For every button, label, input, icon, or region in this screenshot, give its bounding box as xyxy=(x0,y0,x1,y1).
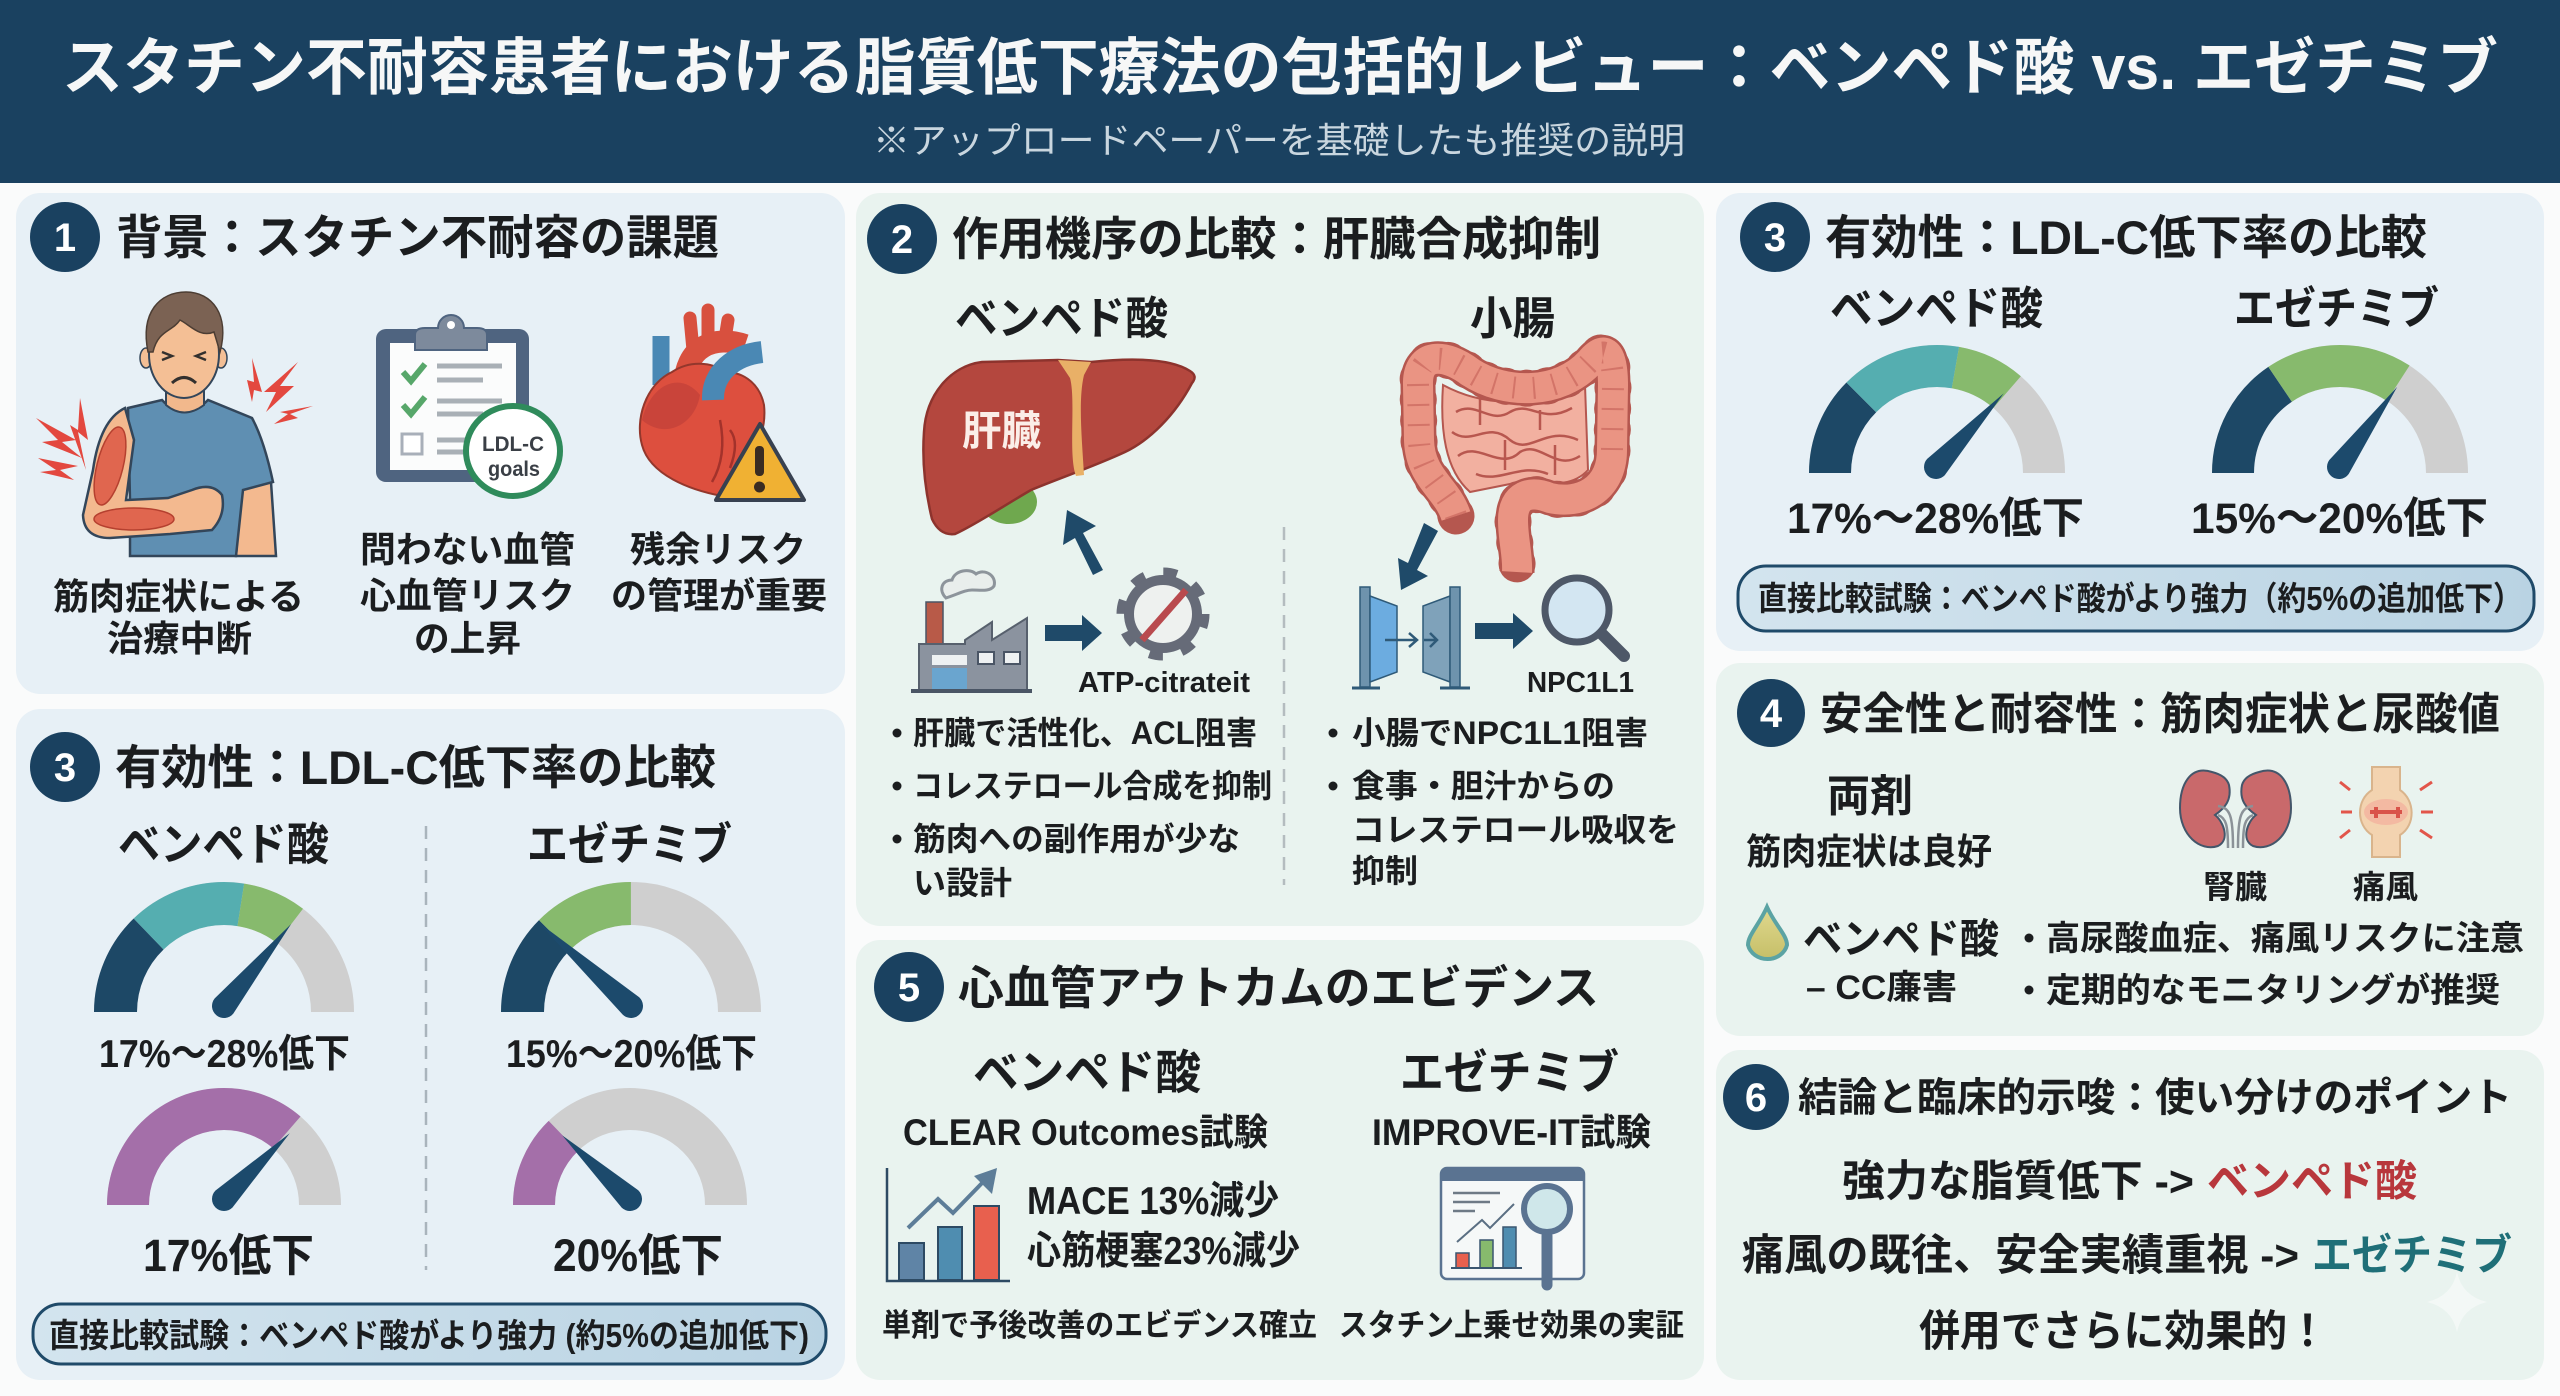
stat: MACE and MI: 心筋梗塞23%減少 xyxy=(1027,1230,1300,1273)
heading: efficacy xyxy=(30,732,716,802)
heading: background xyxy=(30,202,719,272)
icon: membrane transporter xyxy=(1352,587,1470,688)
bullets: ezetimibe mechanism: コレステロール吸収を xyxy=(1352,812,1679,848)
text: combination: 併用でさらに効果的！ xyxy=(1919,1308,2328,1356)
icon: heart with warning xyxy=(640,310,804,500)
icon: liver: 肝臓 xyxy=(962,408,1041,454)
value: 20%: 20%低下 xyxy=(553,1230,723,1281)
heading: conclusion xyxy=(1723,1064,2512,1130)
text: bempedoic caution xyxy=(1803,916,1999,1007)
label: cardiovascular risk xyxy=(360,529,575,659)
heading: bempedoic acid: ベンペド酸 xyxy=(955,293,1168,344)
heading: outcomes xyxy=(874,952,1599,1022)
label: residual risk xyxy=(611,529,827,616)
gauge: ezetimibe 20% xyxy=(534,1109,726,1216)
bullets: uric acid risks xyxy=(2024,920,2524,1010)
header banner xyxy=(0,0,2560,183)
arrow: intestine to membrane xyxy=(1398,523,1438,590)
heading: bempedoic acid: ベンペド酸 xyxy=(1830,283,2043,334)
panel: 4 safety xyxy=(1716,663,2544,1036)
label: kidney: 腎臓 xyxy=(2203,869,2267,905)
label: residual risk: の管理が重要 xyxy=(611,575,827,616)
icon: analysis window xyxy=(1441,1168,1584,1285)
heading: safety: 安全性と耐容性：筋肉症状と尿酸値 xyxy=(1820,690,2500,739)
label: treatment discontinuation: 治療中断 xyxy=(107,618,252,659)
value: 17%: 17%低下 xyxy=(143,1230,314,1281)
text: both drugs: 両剤 xyxy=(1827,772,1913,821)
label: NPC1L1: NPC1L1 xyxy=(1527,667,1634,699)
text: bempedoic caution: – CC廉害 xyxy=(1806,969,1957,1007)
icon: clipboard LDL-C goals: goals xyxy=(488,458,540,481)
heading: conclusion: 結論と臨床的示唆：使い分けのポイント xyxy=(1798,1076,2512,1120)
bullets: bempedoic mechanism: 筋肉への副作用が少な xyxy=(913,821,1240,857)
panel: 2 mechanism xyxy=(856,193,1704,926)
heading: bempedoic acid: ベンペド酸 xyxy=(973,1046,1201,1099)
subtitle: ※アップロードペーパーを基礎したも推奨の説明 xyxy=(873,120,1685,161)
stat: MACE and MI: MACE 13%減少 xyxy=(1027,1180,1279,1223)
heading: conclusion: 6 xyxy=(1745,1076,1767,1120)
trial: CLEAR Outcomes: CLEAR Outcomes試験 xyxy=(903,1112,1268,1153)
icon: liver xyxy=(923,360,1195,534)
icon: man with muscle pain xyxy=(36,292,313,556)
arrow: membrane to magnifier xyxy=(1475,613,1533,649)
text: potent lowering recommendation: 強力な脂質低下 -> xyxy=(1842,1158,2194,1206)
label: cardiovascular risk: 心血管リスク xyxy=(360,575,575,616)
chart: rising bars xyxy=(887,1168,1010,1281)
heading: mechanism: 作用機序の比較：肝臓合成抑制 xyxy=(952,213,1601,265)
text: both drugs: 筋肉症状は良好 xyxy=(1746,831,1992,872)
stat: MACE and MI xyxy=(1027,1180,1300,1273)
heading: bempedoic acid: ベンペド酸 xyxy=(118,819,329,870)
gauge: ezetimibe 15-20% xyxy=(2233,366,2447,484)
icon: clipboard LDL-C goals xyxy=(376,315,560,496)
arrow: to liver xyxy=(1063,510,1103,575)
panel: 6 conclusion xyxy=(1716,1050,2544,1380)
heading: efficacy: 有効性：LDL-C低下率の比較 xyxy=(115,741,716,794)
heading: mechanism xyxy=(867,204,1601,274)
text: bempedoic caution: ベンペド酸 xyxy=(1803,916,1999,962)
trial: IMPROVE-IT: IMPROVE-IT試験 xyxy=(1372,1112,1651,1153)
panel: 5 cardiovascular outcomes xyxy=(856,940,1704,1380)
bullets: ezetimibe mechanism: 抑制 xyxy=(1352,853,1418,889)
text: potent lowering recommendation: ベンペド酸 xyxy=(2207,1158,2417,1206)
icon: kidneys xyxy=(2180,771,2291,848)
heading: safety: 4 xyxy=(1760,692,1783,736)
value: 17-28%: 17%～28%低下 xyxy=(1787,495,2084,543)
heading: safety xyxy=(1737,679,2500,747)
label: gout: 痛風 xyxy=(2353,869,2418,905)
heading: ezetimibe: エゼチミブ xyxy=(527,819,732,870)
heading: efficacy: 3 xyxy=(1764,216,1786,260)
bullets: uric acid risks: 高尿酸血症、痛風リスクに注意 xyxy=(2046,920,2524,958)
callout: head-to-head xyxy=(33,1304,826,1364)
gauge: bempedoic 17-28% xyxy=(116,904,332,1023)
arrow: factory to gear xyxy=(1045,615,1102,651)
heading: ezetimibe: エゼチミブ xyxy=(1400,1046,1619,1099)
title: スタチン不耐容患者における脂質低下療法の包括的レビュー：ベンペド酸 vs. エゼチミブ xyxy=(62,34,2498,103)
icon: intestine xyxy=(1418,353,1613,572)
icon: clipboard LDL-C goals: LDL-C xyxy=(482,433,544,456)
label: cardiovascular risk: 問わない血管 xyxy=(360,529,575,570)
gauge: bempedoic 17% xyxy=(128,1109,320,1216)
text: ezetimibe conclusion: スタチン上乗せ効果の実証 xyxy=(1339,1308,1684,1343)
callout: head-to-head xyxy=(1738,566,2534,631)
value: 15-20%: 15%～20%低下 xyxy=(506,1033,757,1076)
heading: efficacy xyxy=(1740,202,2427,272)
icon: drop xyxy=(1748,907,1787,959)
icon: factory xyxy=(911,571,1032,691)
bullets: ezetimibe mechanism: 食事・胆汁からの xyxy=(1352,768,1615,804)
heading: efficacy: 有効性：LDL-C低下率の比較 xyxy=(1825,211,2427,264)
bullets: uric acid risks: 定期的なモニタリングが推奨 xyxy=(2046,971,2500,1010)
heading: efficacy: 3 xyxy=(54,746,76,790)
heading: background: 1 xyxy=(54,216,76,260)
value: 17-28%: 17%～28%低下 xyxy=(99,1033,350,1076)
heading: outcomes: 心血管アウトカムのエビデンス xyxy=(958,962,1599,1014)
text: potent lowering recommendation xyxy=(1842,1158,2417,1206)
gauge: ezetimibe 15-20% xyxy=(522,903,740,1023)
label: treatment discontinuation xyxy=(53,576,304,659)
text: gout history recommendation: 痛風の既往、安全実績重視 -> xyxy=(1742,1232,2299,1280)
bullets: ezetimibe mechanism xyxy=(1328,715,1679,889)
label: ATP-citrate: ATP-citrateit xyxy=(1078,667,1250,699)
callout: head-to-head: 直接比較試験：ベンペド酸がより強力 (約5%の追加低下) xyxy=(49,1317,809,1354)
bullets: bempedoic mechanism: 肝臓で活性化、ACL阻害 xyxy=(913,715,1257,751)
heading: background: 背景：スタチン不耐容の課題 xyxy=(116,211,719,264)
panel: 1 background xyxy=(16,193,845,694)
bullets: bempedoic mechanism xyxy=(892,715,1272,901)
heading: ezetimibe: エゼチミブ xyxy=(2234,283,2439,334)
label: residual risk: 残余リスク xyxy=(630,529,806,570)
text: gout history recommendation: エゼチミブ xyxy=(2312,1232,2512,1280)
icon: gear with slash xyxy=(1122,573,1204,655)
bullets: ezetimibe mechanism: 小腸でNPC1L1阻害 xyxy=(1352,715,1648,751)
text: bempedoic conclusion: 単剤で予後改善のエビデンス確立 xyxy=(882,1308,1317,1343)
icon: inflamed joint xyxy=(2340,767,2433,857)
bullets: bempedoic mechanism: コレステロール合成を抑制 xyxy=(913,768,1272,804)
panel: 3 efficacy (left) xyxy=(16,709,845,1380)
label: cardiovascular risk: の上昇 xyxy=(414,618,521,659)
heading: small intestine: 小腸 xyxy=(1470,293,1555,344)
gauge: bempedoic 17-28% xyxy=(1830,366,2044,484)
text: both drugs xyxy=(1746,772,1992,872)
value: 15-20%: 15%～20%低下 xyxy=(2191,495,2488,543)
heading: mechanism: 2 xyxy=(891,218,913,262)
label: treatment discontinuation: 筋肉症状による xyxy=(53,576,304,617)
panel: 3 efficacy (right) xyxy=(1716,193,2544,651)
icon: magnifier xyxy=(1545,578,1624,656)
heading: outcomes: 5 xyxy=(898,966,920,1010)
bullets: bempedoic mechanism: い設計 xyxy=(913,865,1012,901)
